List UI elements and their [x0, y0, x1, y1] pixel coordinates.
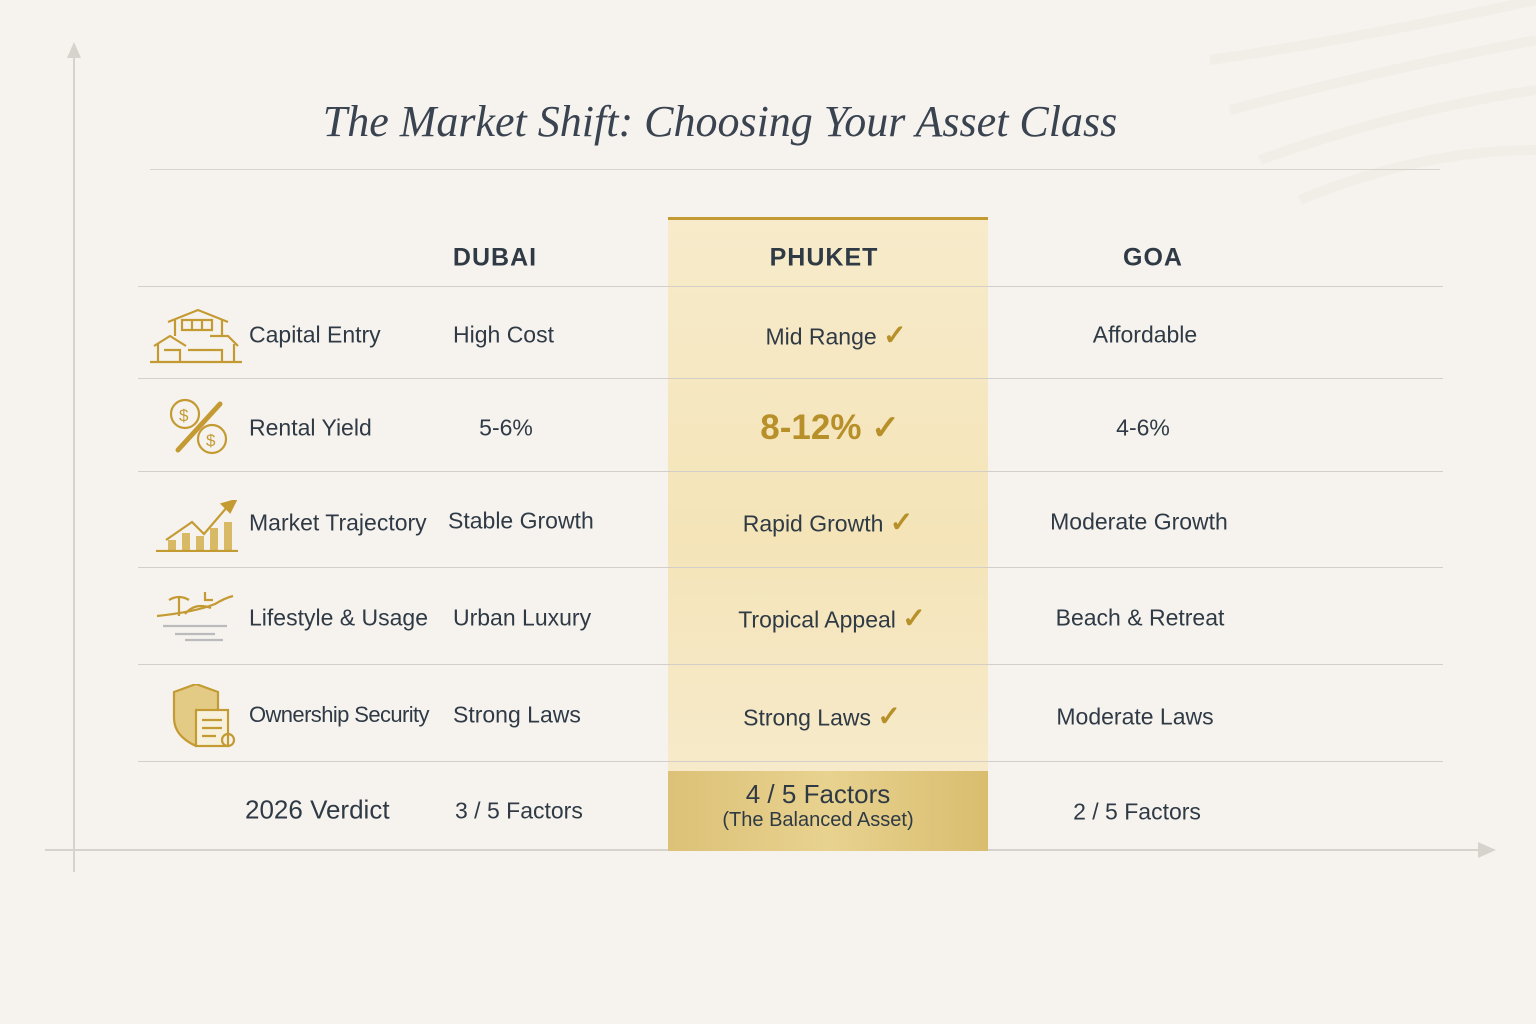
row: Ownership Security: Ownership Security [249, 702, 429, 727]
icon: chart [156, 500, 238, 552]
icon: lifestyle [156, 592, 234, 642]
row: Capital Entry: Capital Entry [249, 322, 381, 348]
text: Urban Luxury [453, 604, 591, 630]
text: Moderate Laws [1056, 704, 1214, 730]
text: Rapid Growth ✓ [743, 506, 913, 538]
text: PHUKET [770, 244, 878, 272]
text: 8-12% ✓ [760, 408, 900, 447]
text: Beach & Retreat [1056, 604, 1224, 630]
text: High Cost [453, 322, 554, 348]
text: GOA [1123, 244, 1183, 272]
text: 2 / 5 Factors [1073, 798, 1201, 824]
icon: house [150, 308, 242, 364]
row: Lifestyle: Lifestyle & Usage [249, 604, 428, 630]
text: Strong Laws [453, 702, 581, 728]
text: 4 / 5 Factors [746, 779, 890, 809]
icon: percent [170, 398, 228, 454]
text: Stable Growth [448, 508, 594, 534]
text: Moderate Growth [1050, 508, 1228, 534]
verdict cell [668, 771, 988, 851]
icon: shield [172, 684, 236, 748]
text: Tropical Appeal ✓ [738, 602, 926, 634]
text: (The Balanced Asset) [722, 809, 914, 831]
row: Market Trajectory: Market Trajectory [249, 510, 427, 536]
text: Strong Laws ✓ [743, 700, 901, 732]
text: 5-6% [479, 414, 533, 440]
text: 4-6% [1116, 414, 1170, 440]
icon: percent: $ [179, 406, 189, 425]
row: Rental Yield: Rental Yield [249, 414, 372, 440]
title: The Market Shift: Choosing Your Asset Class [323, 97, 1117, 146]
text: Mid Range ✓ [765, 320, 907, 350]
text: 3 / 5 Factors [455, 798, 583, 824]
phuket highlight column [668, 217, 988, 850]
row: verdict: 2026 Verdict [245, 794, 390, 824]
column headers: DUBAI [453, 244, 537, 272]
icon: percent: $ [206, 431, 216, 450]
text: Affordable [1093, 322, 1197, 348]
